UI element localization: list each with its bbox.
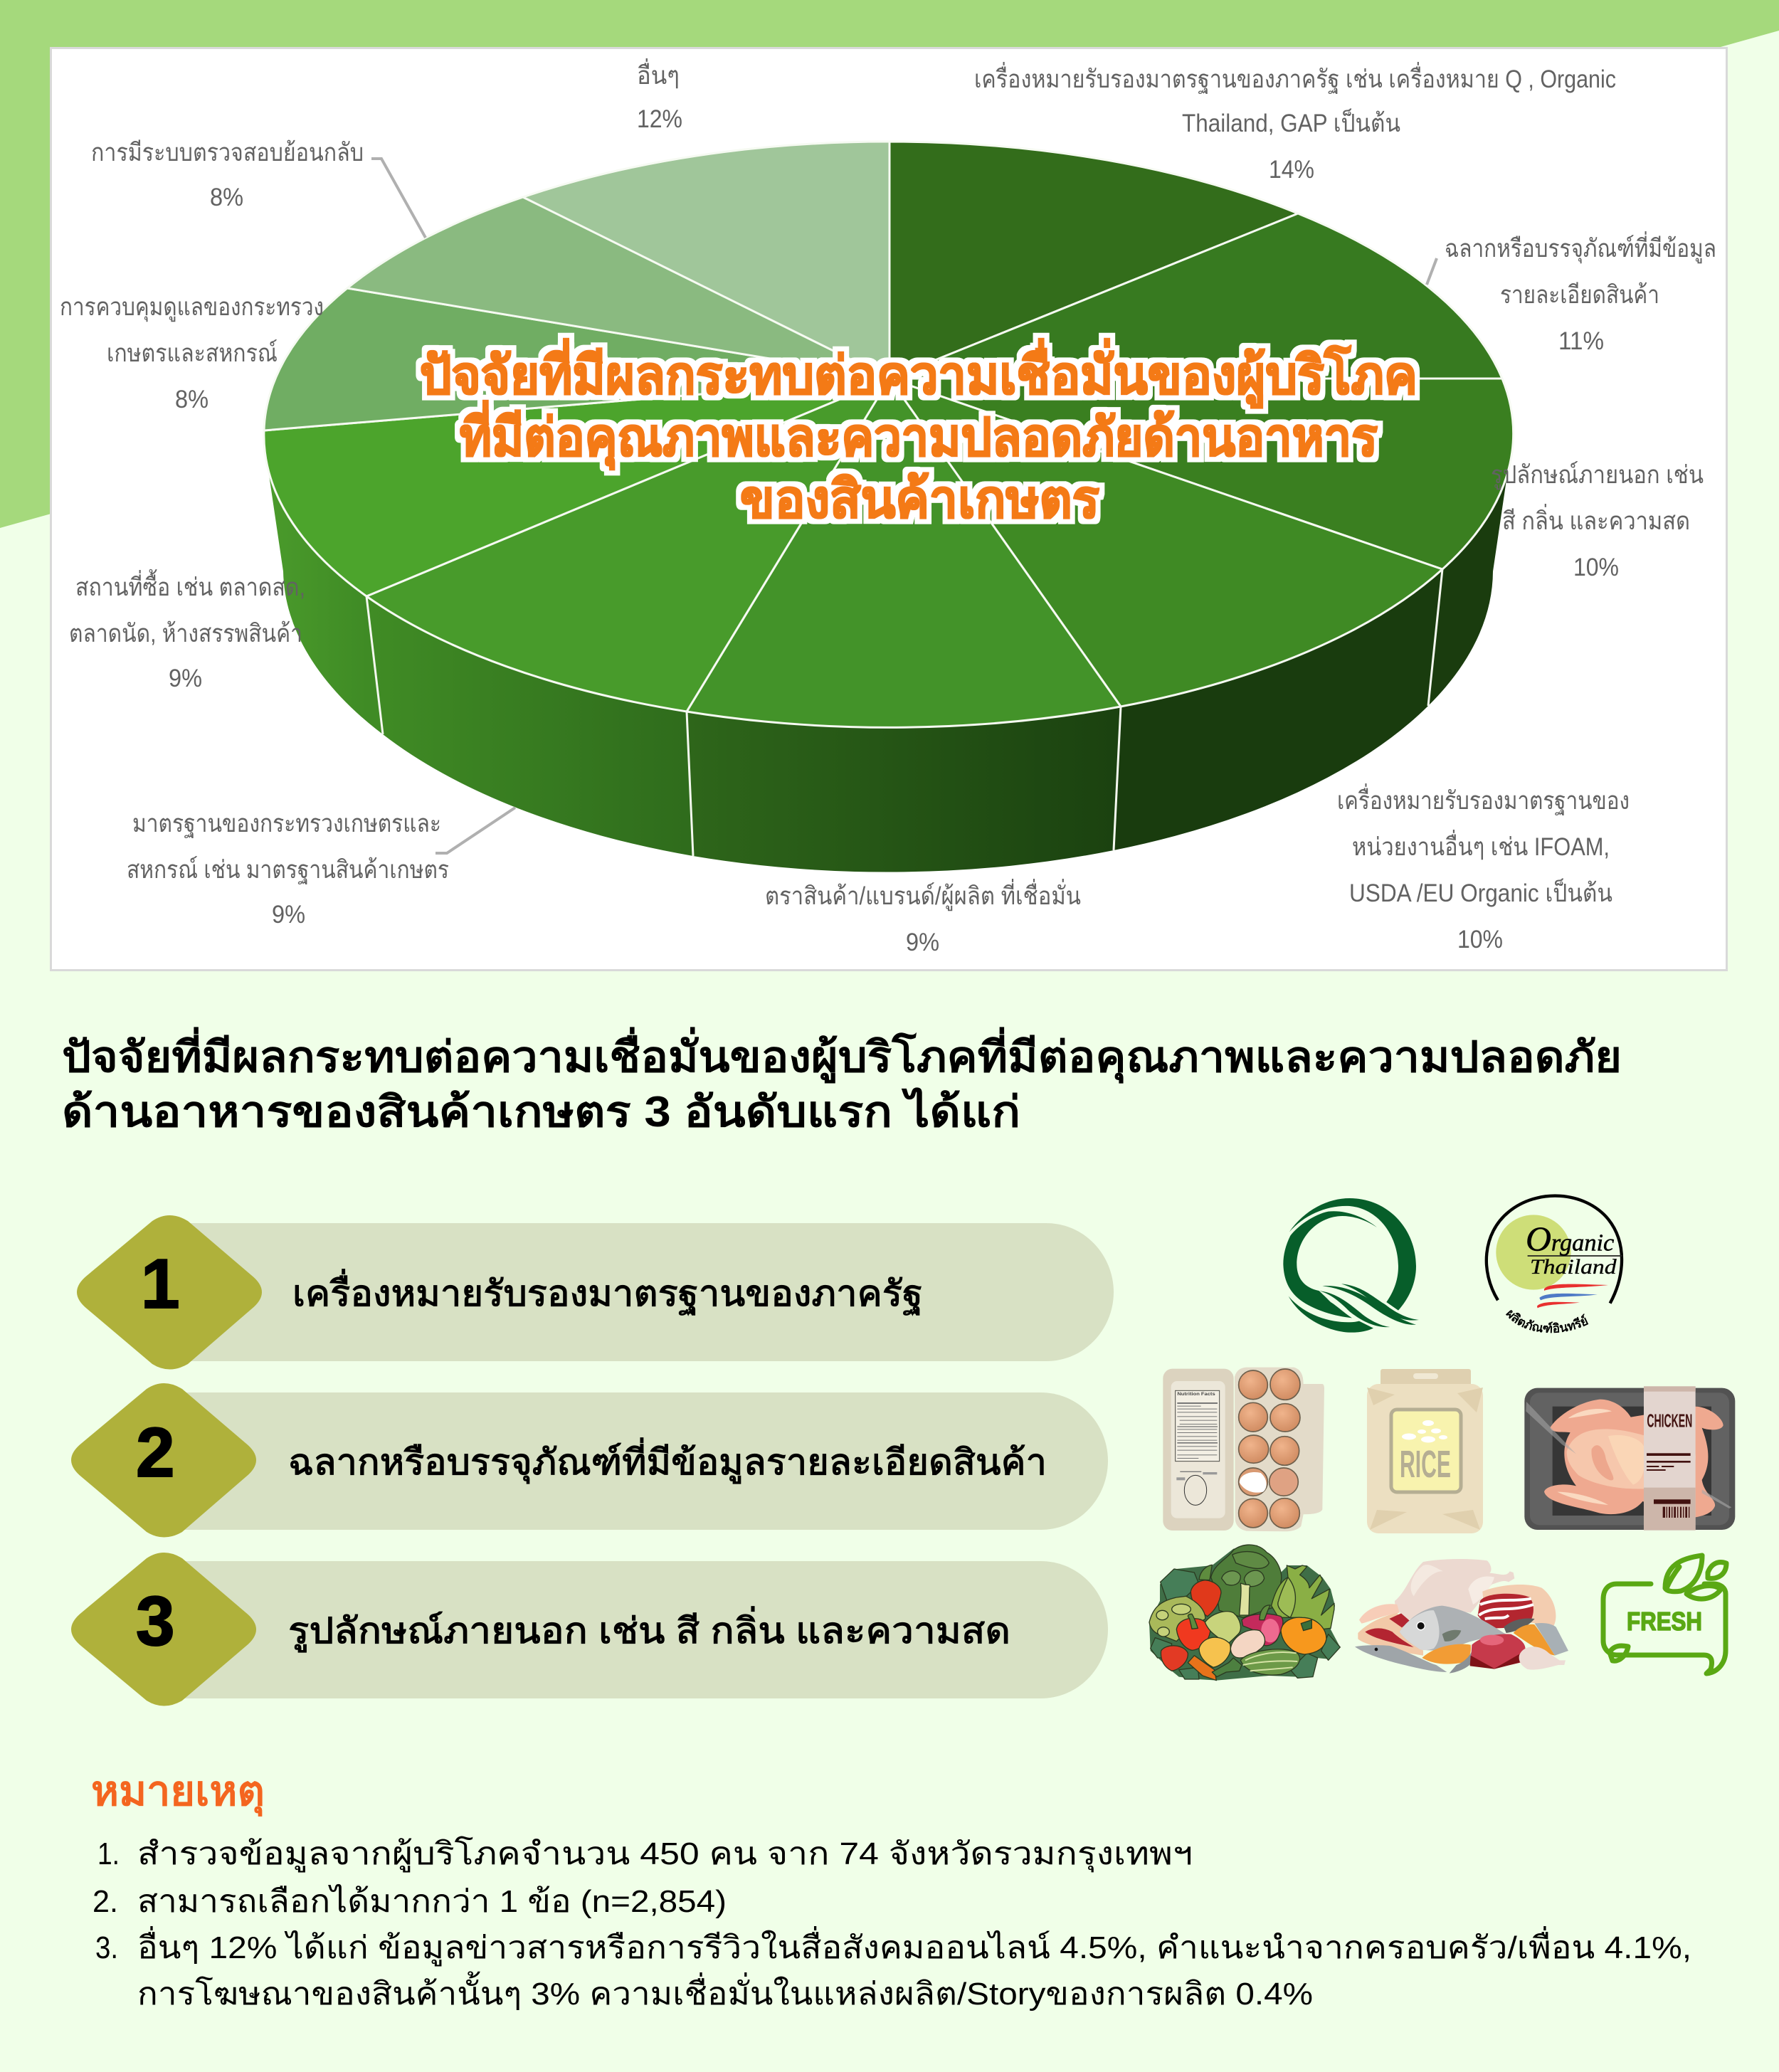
label: packaging information: 11%	[1558, 327, 1604, 355]
panel: pie chart	[51, 48, 1726, 971]
label: state certification: 14%	[1269, 156, 1314, 184]
notes list: การโฆษณาของสินค้านั้นๆ 3% ความเชื่อมั่นในแหล่งผลิต/Storyของการผลิต 0.4%	[137, 1971, 1313, 2012]
number 2: 2	[136, 1413, 175, 1491]
icon: fresh label	[1603, 1555, 1726, 1674]
label: appearance: 10%	[1573, 554, 1619, 581]
heading: ด้านอาหารของสินค้าเกษตร 3 อันดับแรก ได้แก่	[62, 1087, 1020, 1136]
ranking item 3	[71, 1553, 1108, 1706]
label: place of purchase: ตลาดนัด, ห้างสรรพสินค้า	[69, 620, 302, 648]
ranking item 1	[77, 1215, 1114, 1369]
icon: packaged chicken: CHICKEN	[1647, 1410, 1692, 1432]
icon: Organic Thailand logo: Thailand	[1530, 1256, 1617, 1279]
notes list: 2.	[93, 1884, 118, 1919]
diamond 3	[71, 1553, 256, 1706]
label: other agency certification: เครื่องหมายรับรองมาตรฐานของ	[1337, 783, 1630, 815]
label: ministry standard: สหกรณ์ เช่น มาตรฐานสินค้าเกษตร	[127, 856, 449, 884]
label: traceability: การมีระบบตรวจสอบย้อนกลับ	[91, 139, 364, 166]
label: packaging information	[1445, 231, 1716, 355]
label: appearance: สี กลิ่น และความสด	[1502, 504, 1690, 535]
label: traceability	[91, 139, 364, 211]
label: place of purchase: สถานที่ซื้อ เช่น ตลาดสด,	[75, 569, 305, 601]
label: ministry oversight: 8%	[175, 386, 208, 413]
label: brand	[765, 879, 1081, 956]
notes list: 1.	[97, 1836, 120, 1871]
icon: assorted meat and fish	[1355, 1559, 1568, 1674]
number 1: 1	[141, 1244, 180, 1323]
diamond 1	[77, 1215, 262, 1369]
chart title: ที่มีต่อคุณภาพและความปลอดภัยด้านอาหาร	[460, 400, 1378, 470]
label: ministry standard: มาตรฐานของกระทรวงเกษตรและ	[132, 810, 441, 838]
chart title: ของสินค้าเกษตร	[740, 470, 1099, 529]
label: place of purchase: 9%	[169, 665, 202, 692]
label: state certification: เครื่องหมายรับรองมาตรฐานของภาครัฐ เช่น เครื่องหมาย Q , Organic	[974, 62, 1616, 94]
label: state certification: Thailand, GAP เป็นต้น	[1182, 108, 1400, 137]
heading: ปัจจัยที่มีผลกระทบต่อความเชื่อมั่นของผู้บริโภคที่มีต่อคุณภาพและความปลอดภัย	[62, 1027, 1622, 1084]
notes list: สามารถเลือกได้มากกว่า 1 ข้อ (n=2,854)	[137, 1883, 727, 1919]
number 3: 3	[136, 1582, 175, 1660]
icon: Organic Thailand logo: ผลิตภัณฑ์อินทรีย์	[1506, 1310, 1588, 1333]
icon: Q mark logo	[1283, 1198, 1419, 1333]
chart title	[420, 338, 1418, 529]
text 3: รูปลักษณ์ภายนอก เช่น สี กลิ่น และความสด	[288, 1607, 1010, 1652]
icon: fresh label: FRESH	[1627, 1607, 1702, 1636]
leader lines	[371, 159, 1437, 853]
eggs	[1239, 1369, 1300, 1528]
label: other agency certification: 10%	[1457, 926, 1503, 953]
label: ministry oversight: การควบคุมดูแลของกระทรวง	[60, 293, 324, 322]
label: place of purchase	[69, 569, 305, 692]
notes list: สำรวจข้อมูลจากผู้บริโภคจำนวน 450 คน จาก 74 จังหวัดรวมกรุงเทพฯ	[137, 1836, 1193, 1873]
notes list: อื่นๆ 12% ได้แก่ ข้อมูลข่าวสารหรือการรีวิวในสื่อสังคมออนไลน์ 4.5%, คำแนะนำจากครอบครัว/เพื่อน 4.1%,	[137, 1925, 1691, 1967]
label: others: 12%	[637, 105, 682, 133]
icon: egg carton	[1163, 1368, 1324, 1531]
label: ministry oversight: เกษตรและสหกรณ์	[107, 339, 278, 367]
diamond 2	[71, 1383, 256, 1537]
label: others: อื่นๆ	[637, 58, 680, 90]
ranking item 2	[71, 1383, 1108, 1537]
3D pie top face slices	[264, 142, 1514, 727]
nutrition facts label: Nutrition Facts	[1177, 1392, 1215, 1397]
icon: Organic Thailand logo: Organic	[1526, 1220, 1614, 1258]
label: others	[637, 58, 682, 133]
notes list: 3.	[95, 1930, 118, 1965]
nutrition facts label	[1176, 1390, 1220, 1462]
heading	[62, 1027, 1622, 1136]
text 2: ฉลากหรือบรรจุภัณฑ์ที่มีข้อมูลรายละเอียดสินค้า	[288, 1438, 1047, 1484]
label: packaging information: รายละเอียดสินค้า	[1500, 281, 1659, 309]
label: ministry oversight	[60, 293, 324, 413]
label: appearance: รูปลักษณ์ภายนอก เช่น	[1491, 461, 1704, 490]
label: traceability: 8%	[210, 184, 243, 211]
label: brand: 9%	[906, 929, 939, 956]
label: other agency certification: หน่วยงานอื่นๆ เช่น IFOAM,	[1352, 830, 1610, 861]
text 1: เครื่องหมายรับรองมาตรฐานของภาครัฐ	[292, 1269, 923, 1315]
label: other agency certification	[1337, 783, 1630, 953]
label: appearance	[1491, 461, 1704, 581]
label: packaging information: ฉลากหรือบรรจุภัณฑ์ที่มีข้อมูล	[1445, 231, 1716, 263]
icon: packaged chicken	[1524, 1386, 1735, 1531]
label: brand: ตราสินค้า/แบรนด์/ผู้ผลิต ที่เชื่อมั่น	[765, 879, 1081, 911]
label: ministry standard	[127, 810, 449, 929]
notes heading: หมายเหตุ	[91, 1768, 265, 1817]
top green banner	[0, 0, 1779, 528]
chart title: ปัจจัยที่มีผลกระทบต่อความเชื่อมั่นของผู้บริโภค	[420, 338, 1418, 408]
icon: Organic Thailand logo	[1484, 1194, 1624, 1333]
icon: rice bag	[1367, 1369, 1483, 1533]
icon: vegetables	[1149, 1545, 1340, 1681]
label: ministry standard: 9%	[272, 901, 305, 929]
3D pie side wall	[264, 441, 1512, 872]
label: state certification	[974, 62, 1616, 184]
label: other agency certification: USDA /EU Organic เป็นต้น	[1349, 878, 1612, 907]
icon: rice bag: RICE	[1400, 1443, 1451, 1486]
notes list	[93, 1836, 1691, 2012]
